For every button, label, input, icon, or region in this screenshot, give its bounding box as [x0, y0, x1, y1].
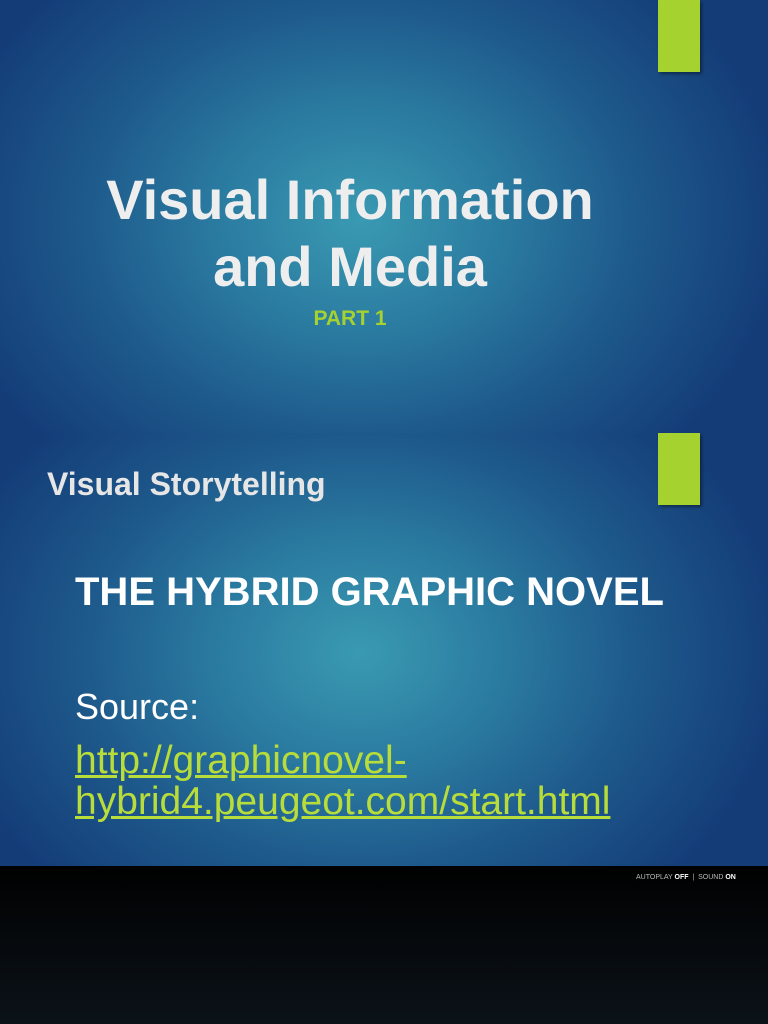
- heading: visual storytelling: Visual Storytelling: [47, 466, 326, 502]
- link: source url: hybrid4.peugeot.com/start.html: [75, 780, 610, 823]
- title: and Media: [213, 235, 487, 298]
- link: source url: [75, 739, 610, 823]
- text: the hybrid graphic novel: THE HYBRID GRAPHIC NOVEL: [75, 570, 664, 614]
- link: source url: http://graphicnovel-: [75, 739, 407, 782]
- text: autoplay/sound controls: AUTOPLAY OFF | SOUND ON: [636, 874, 736, 881]
- panel: slide 2: [0, 433, 768, 867]
- text: source: Source:: [75, 686, 199, 727]
- subtitle: part 1: PART 1: [313, 307, 387, 330]
- panel: dark video strip: [0, 866, 768, 1024]
- icon: green bar top: [658, 0, 700, 72]
- title: [106, 168, 594, 298]
- panel: slide 1: [0, 0, 768, 434]
- title: Visual Information: [106, 168, 594, 231]
- icon: green bar: [658, 433, 700, 505]
